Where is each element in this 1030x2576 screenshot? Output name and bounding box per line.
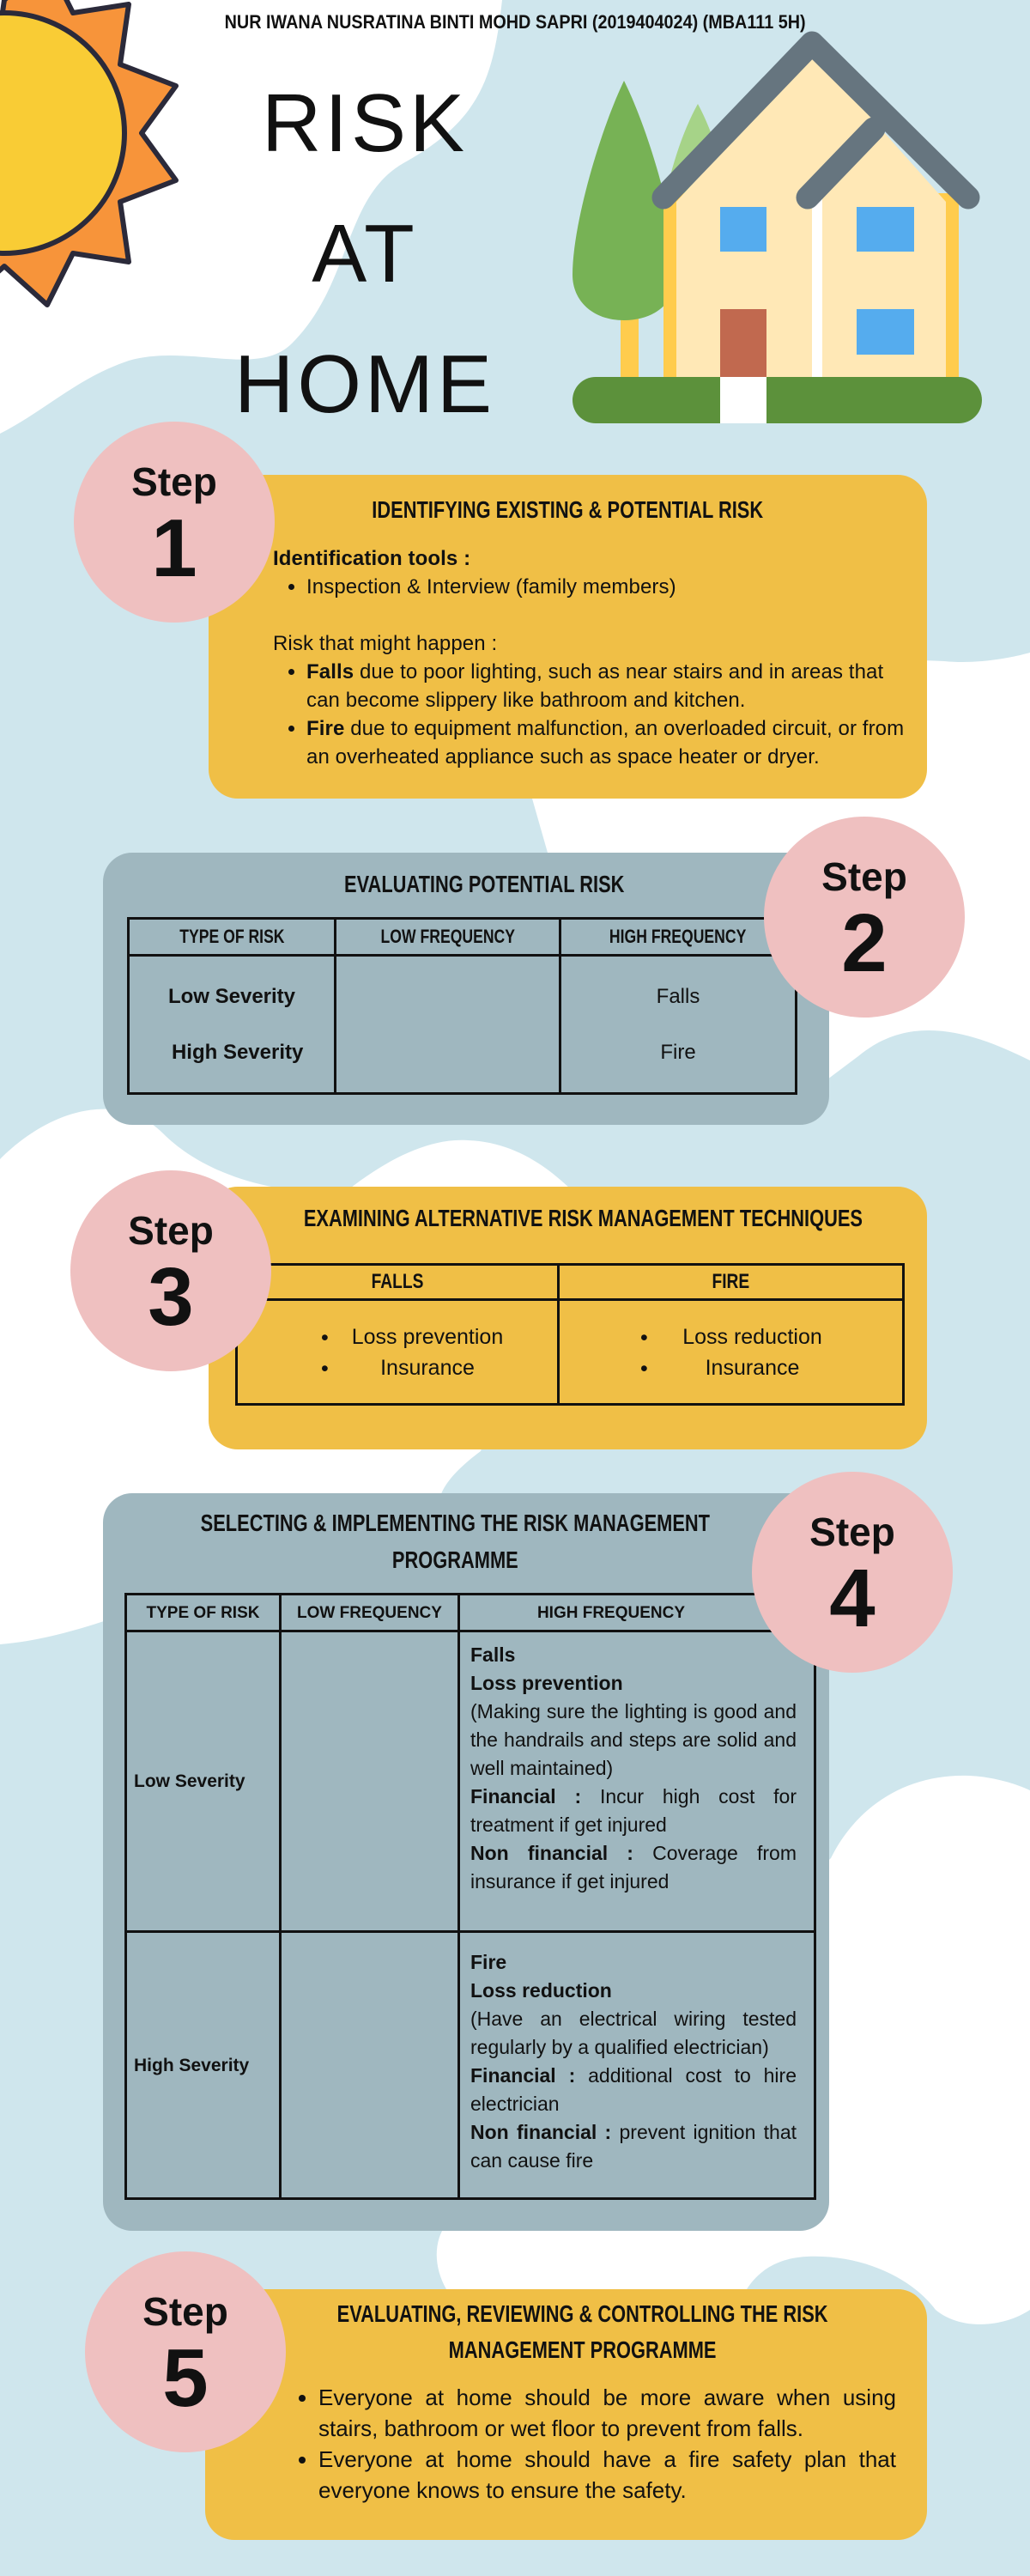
panel: step 4 [103,1493,829,2231]
heading: step 5: MANAGEMENT PROGRAMME [449,2336,717,2363]
text: step 1: Identification tools : [273,547,470,570]
table: step 3: FALLS [372,1270,423,1293]
circle: step 4 [752,1472,953,1673]
circle: step 2: 2 [841,897,888,989]
icon: sun [0,0,176,305]
heading: step 4 [200,1510,710,1573]
heading: step 1: IDENTIFYING EXISTING & POTENTIAL RISK [373,496,763,523]
circle: step 1: 1 [151,502,197,594]
panel: step 3 [209,1187,927,1449]
text: step 5 [299,2385,896,2503]
table: step 3: • [640,1357,648,1381]
circle: step 4: Step [809,1510,895,1554]
title [234,77,495,430]
table: step 4 [124,1593,816,2200]
panel: step 1 [209,475,927,799]
text: step 1: Falls due to poor lighting, such as near stairs and in areas that can become slippery like bathroom and kitchen. [306,660,883,712]
heading: step 5 [337,2300,828,2363]
table: step 4: (Have an electrical wiring tested regularly by a qualified electrician) [470,2008,797,2058]
table: step 3: Insurance [380,1355,475,1379]
table: step 4: Financial : additional cost to hire electrician [470,2064,797,2115]
table: step 3: Loss prevention [352,1324,503,1348]
circle: step 5 [85,2251,286,2452]
table: step 4: Financial : Incur high cost for treatment if get injured [470,1785,797,1836]
table: step 2: High Severity [172,1041,303,1064]
table: step 3: • [321,1357,329,1381]
text: step 1: Risk that might happen : [273,632,497,655]
table: step 2: LOW FREQUENCY [380,926,515,947]
table: step 2 [127,917,797,1095]
text: step 5: Everyone at home should be more aware when using stairs, bathroom or wet floor to prevent from falls. [318,2385,896,2441]
circle: step 3: 3 [148,1251,194,1343]
text: step 1: Inspection & Interview (family members) [306,575,676,598]
panel: step 5 [205,2289,927,2540]
circle: step 5: 5 [162,2332,209,2424]
heading: step 2: EVALUATING POTENTIAL RISK [344,871,624,897]
table: step 4: Loss prevention [470,1672,623,1694]
text: step 1: Fire due to equipment malfunction, an overloaded circuit, or from an overheated appliance such as space heater or dryer. [306,717,904,769]
table: step 4: TYPE OF RISK [147,1604,259,1621]
circle: step 2 [764,817,965,1018]
title: AT [312,208,418,300]
table: step 3: • [321,1326,329,1350]
text: step 5: Everyone at home should have a fire safety plan that everyone knows to ensure the safety. [318,2446,896,2503]
circle: step 1 [74,422,275,623]
table: step 4: Low Severity [134,1771,245,1791]
table: step 4: High Severity [134,2056,249,2075]
table: step 3: Loss reduction [682,1324,822,1348]
table: step 4: HIGH FREQUENCY [537,1604,685,1621]
table: step 4: LOW FREQUENCY [297,1604,442,1621]
icon: house with trees [573,43,982,423]
table: step 4: Fire [470,1951,506,1973]
table: step 2: HIGH FREQUENCY [609,926,747,947]
table: step 3: Insurance [706,1355,799,1379]
circle: step 3: Step [128,1208,214,1253]
table: step 4: Non financial : prevent ignition that can cause fire [470,2121,797,2172]
panel: step 2 [103,853,829,1125]
circle: step 1: Step [131,459,217,504]
title: HOME [234,338,495,430]
table: step 4: Falls [470,1643,515,1666]
author header: NUR IWANA NUSRATINA BINTI MOHD SAPRI (2019404024) (MBA111 5H) [224,11,805,33]
table: step 2: Fire [660,1041,696,1064]
table: step 3: • [640,1326,648,1350]
table: step 4: (Making sure the lighting is good and the handrails and steps are solid and well maintained) [470,1700,797,1779]
circle: step 2: Step [821,854,907,899]
table: step 3 [235,1263,905,1406]
table: step 2: Low Severity [168,985,295,1008]
table: step 3: FIRE [712,1270,749,1293]
table: step 4: Loss reduction [470,1979,612,2002]
table: step 2: TYPE OF RISK [179,926,284,947]
circle: step 4: 4 [829,1552,876,1644]
text: step 1 [273,547,904,769]
circle: step 5: Step [142,2289,228,2334]
circle: step 3 [70,1170,271,1371]
heading: step 4: SELECTING & IMPLEMENTING THE RISK MANAGEMENT [200,1510,710,1536]
heading: step 5: EVALUATING, REVIEWING & CONTROLLING THE RISK [337,2300,828,2327]
heading: step 4: PROGRAMME [392,1546,518,1573]
title: RISK [262,77,468,169]
heading: step 3: EXAMINING ALTERNATIVE RISK MANAGEMENT TECHNIQUES [303,1205,863,1231]
table: step 4: Non financial : Coverage from insurance if get injured [470,1842,797,1893]
table: step 2: Falls [657,985,700,1008]
